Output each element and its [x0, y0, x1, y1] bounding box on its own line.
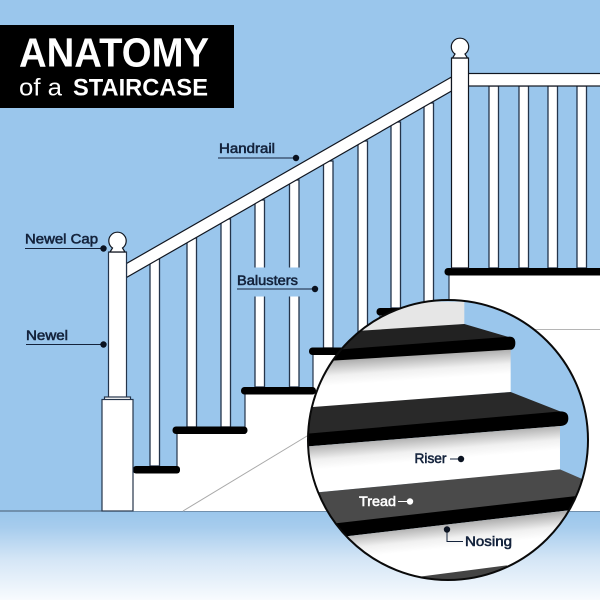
newel post left — [102, 232, 133, 511]
label: newel — [26, 328, 107, 348]
bottom riser — [348, 510, 568, 576]
label: nosing: Nosing — [465, 534, 512, 549]
lower riser — [300, 426, 560, 494]
label: newel cap: Newel Cap — [25, 232, 98, 246]
newel post right — [451, 38, 469, 268]
label: riser: Riser — [414, 451, 447, 466]
stair balusters — [150, 103, 434, 466]
title block: STAIRCASE — [73, 74, 208, 102]
lower tread — [319, 469, 582, 524]
circle outline — [308, 300, 588, 580]
label: balusters: Balusters — [237, 273, 298, 288]
middle tread — [309, 392, 560, 434]
middle nosing — [300, 411, 568, 447]
staircase body — [133, 275, 600, 511]
bottom tread — [421, 565, 508, 579]
label: riser — [414, 451, 464, 466]
lower nosing — [336, 496, 575, 536]
title block: ANATOMY — [19, 30, 209, 76]
label: handrail — [218, 141, 299, 161]
title block — [0, 25, 234, 108]
upper riser — [362, 302, 464, 331]
label: nosing — [444, 526, 512, 549]
label: tread: Tread — [359, 494, 396, 509]
label: newel cap — [25, 232, 107, 252]
upper nosing — [334, 336, 516, 361]
title block: of a — [19, 74, 63, 102]
label: handrail: Handrail — [219, 141, 275, 156]
upper tread — [342, 324, 508, 350]
label: newel: Newel — [26, 328, 68, 343]
floor — [0, 511, 600, 600]
label: tread — [359, 494, 413, 509]
label: balusters — [236, 268, 318, 296]
magnified circle detail — [300, 300, 600, 590]
handrail — [126, 77, 452, 278]
top rail — [468, 74, 600, 86]
middle riser — [300, 350, 511, 409]
stair treads — [133, 268, 600, 474]
landing balusters — [489, 86, 586, 268]
